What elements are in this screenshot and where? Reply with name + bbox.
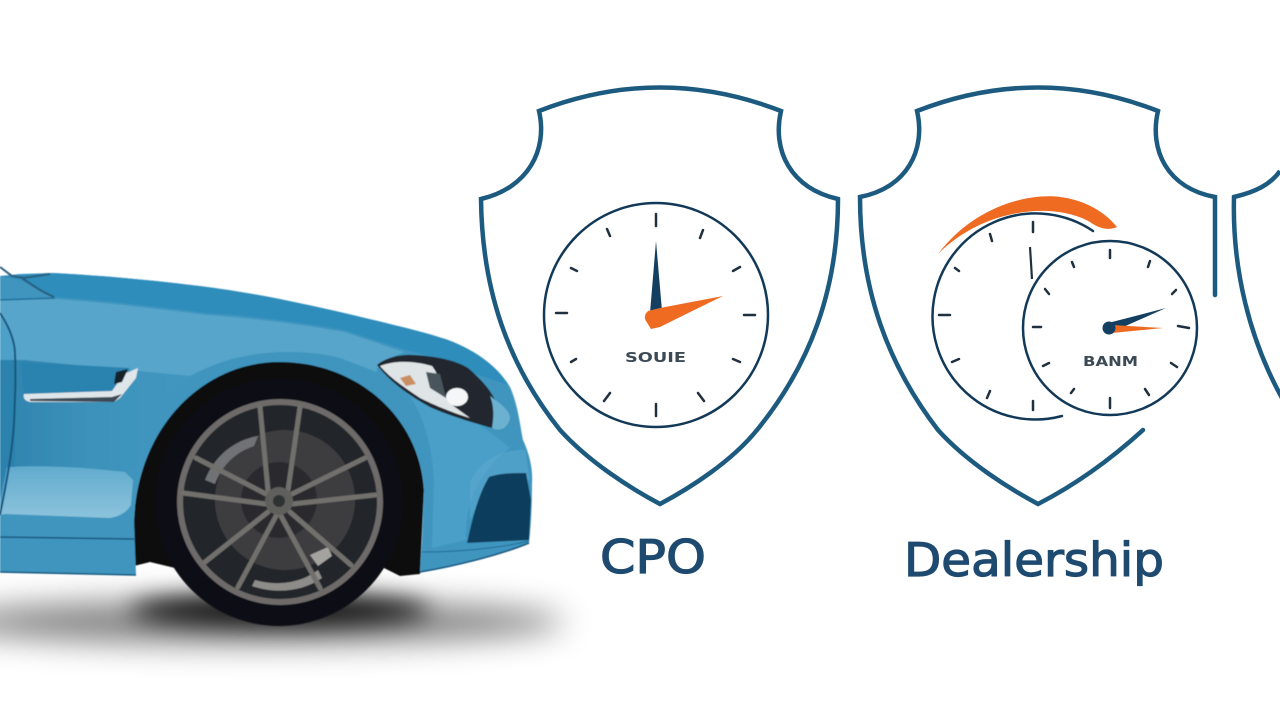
panel: Dealership — [860, 88, 1215, 587]
bumper lower edge — [420, 543, 529, 572]
gauge label: BANM — [1083, 355, 1138, 370]
car with ground shadow — [0, 267, 565, 644]
gauge ticks — [556, 214, 755, 416]
gauge: CPO — [544, 203, 768, 427]
sill lines — [0, 537, 136, 575]
large gauge hand — [1030, 247, 1032, 279]
rim ring — [180, 402, 380, 602]
door seam — [0, 313, 15, 515]
label: CPO: CPO — [600, 530, 706, 584]
gauge: small — [1023, 241, 1197, 415]
car body — [0, 273, 532, 575]
fender vent with chrome strip — [20, 362, 138, 402]
hood upper band — [0, 273, 508, 385]
pivot — [1102, 322, 1116, 334]
brake disc — [215, 430, 355, 570]
wheel arch — [134, 360, 424, 576]
headlight — [377, 355, 510, 430]
orange needle — [645, 296, 723, 329]
panel: CPO — [481, 88, 838, 584]
orange arc — [938, 196, 1117, 254]
side character band — [0, 360, 190, 472]
label: Dealership: Dealership — [904, 533, 1164, 587]
lower side reflection — [0, 466, 133, 518]
gauge label: SOUIE — [625, 351, 686, 366]
door panel — [0, 313, 15, 515]
shield outline: CPO — [481, 88, 838, 504]
car body and wheel — [0, 267, 532, 626]
small gauge ticks — [1033, 250, 1189, 408]
front grille intake — [467, 473, 531, 543]
fender front highlight — [395, 375, 510, 548]
large gauge ticks — [939, 222, 1033, 410]
front wheel — [155, 378, 403, 626]
orange needle — [1112, 325, 1163, 333]
fender light panel — [0, 299, 404, 376]
windshield base — [0, 267, 54, 297]
ground shadow — [0, 594, 565, 644]
hub — [265, 487, 293, 515]
rim well — [180, 402, 380, 602]
spokes — [183, 407, 375, 588]
tyre — [155, 378, 403, 626]
navy needle — [1112, 308, 1166, 332]
shield outline: Dealership — [860, 88, 1215, 504]
shield outline: cropped third — [1234, 171, 1280, 398]
gauge: large — [933, 196, 1117, 419]
navy needle — [650, 241, 662, 313]
